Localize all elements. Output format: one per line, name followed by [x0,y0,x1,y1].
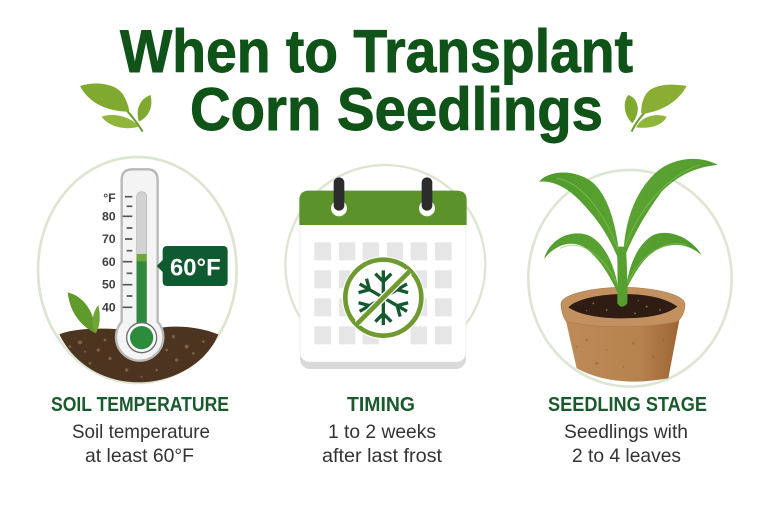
text block: soil temperature: SOIL TEMPERATURE [51,394,229,416]
thermometer scale labels: 80 [102,209,116,223]
title [120,18,633,143]
text block: timing: after last frost [322,445,443,467]
thermometer scale labels [102,191,116,314]
text block: soil temperature [51,394,229,467]
text block: seedling stage: 2 to 4 leaves [572,445,681,467]
text block: timing: TIMING [347,394,415,416]
panel: seedling stage illustration [528,159,732,387]
icon: crossed-out snowflake [342,256,425,339]
text block: timing: 1 to 2 weeks [328,421,436,443]
calendar [299,177,467,369]
thermometer scale labels: 70 [102,232,116,246]
thermometer scale labels: °F [103,191,116,205]
callout: 60°F [157,246,228,286]
thermometer scale labels: 50 [102,278,116,292]
thermometer [116,169,163,361]
title: Corn Seedlings [190,76,603,143]
icon: small sprout [68,292,100,333]
circle frame [285,165,485,365]
title: When to Transplant [120,18,633,85]
soil mound [59,327,218,382]
callout: 60°F: 60°F [170,255,221,282]
panel: soil temperature illustration [38,157,237,383]
potting soil [568,294,677,318]
text block: soil temperature: at least 60°F [85,445,194,467]
thermometer scale labels: 60 [102,255,116,269]
corn seedling [539,159,718,307]
text block: soil temperature: Soil temperature [72,421,210,443]
text block: timing [322,394,443,467]
peat pot [561,287,685,382]
icon: left leaf sprig [80,84,151,132]
thermometer scale labels: 40 [102,300,116,314]
icon: right leaf sprig [625,85,687,132]
text block: seedling stage: SEEDLING STAGE [548,394,707,416]
text block: seedling stage: Seedlings with [564,421,688,443]
text block: seedling stage [548,394,707,467]
oval frame [38,157,237,383]
panel: timing illustration [285,165,485,369]
circle frame [528,170,732,387]
